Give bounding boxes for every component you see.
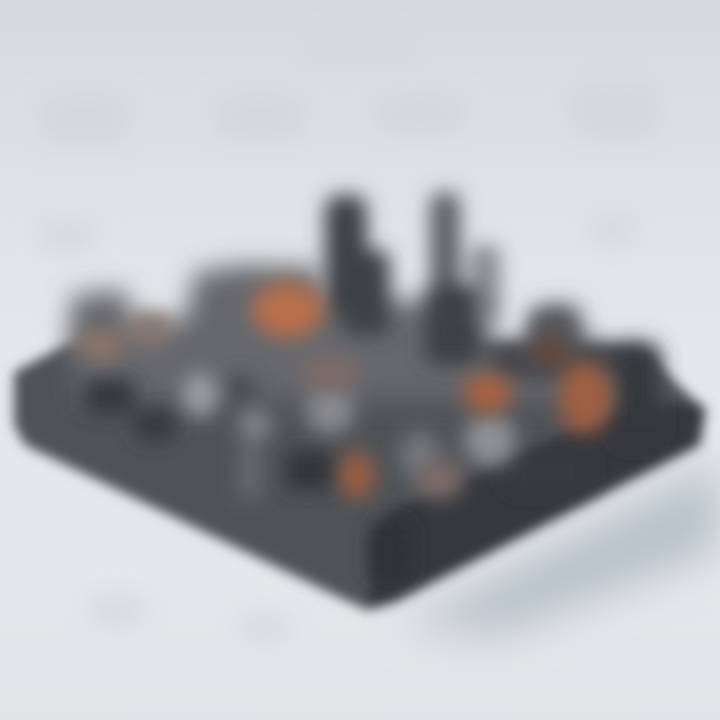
- faint background cards: [40, 38, 660, 640]
- floor shadow: [400, 460, 720, 635]
- tower cluster silhouette: [68, 265, 660, 400]
- platform right dark face: [368, 400, 704, 610]
- light grey blocks: [182, 373, 516, 500]
- dark towers: [85, 192, 660, 580]
- platform silhouette: [14, 340, 706, 610]
- orange blobs: [76, 282, 611, 500]
